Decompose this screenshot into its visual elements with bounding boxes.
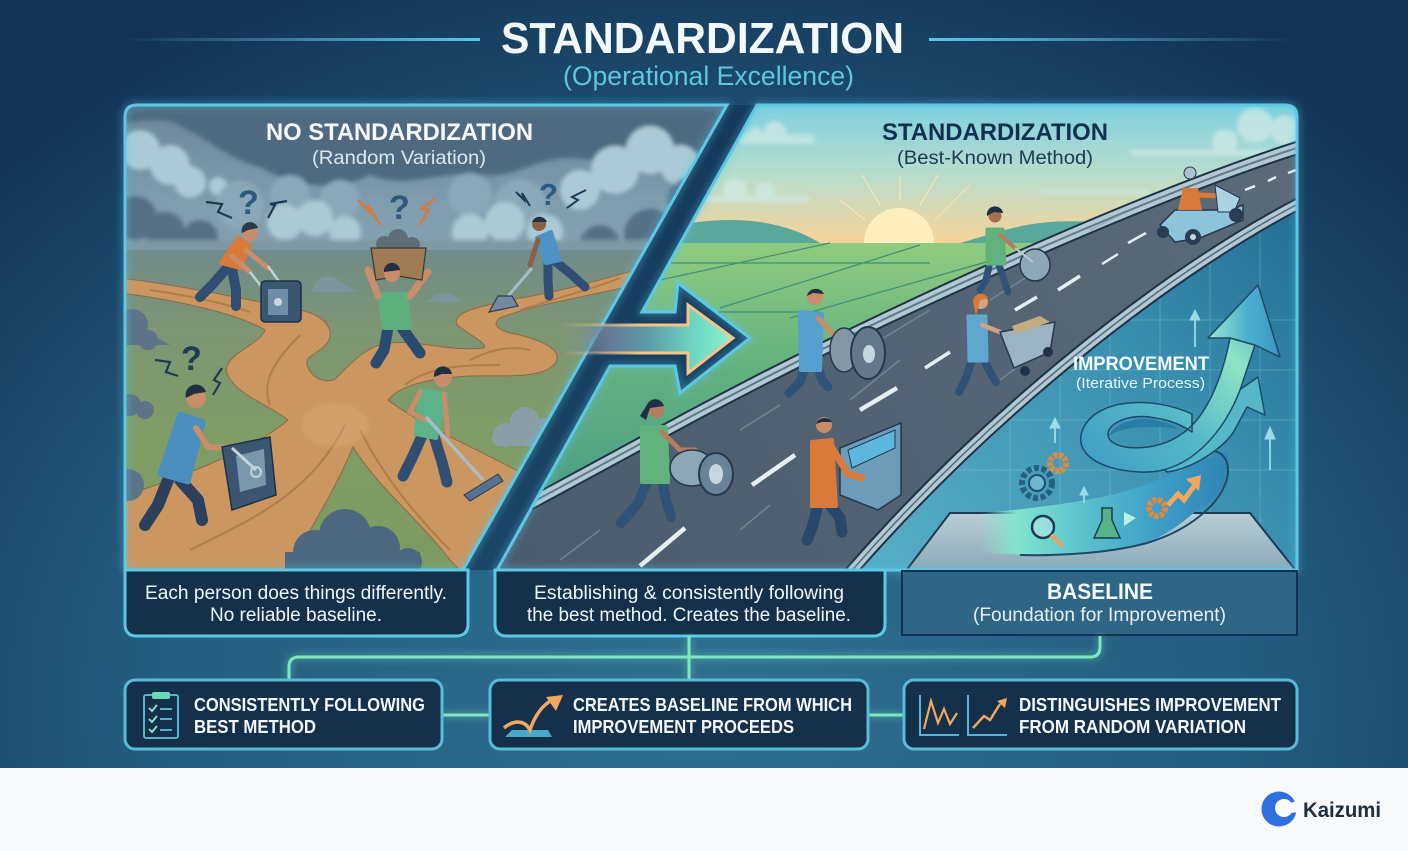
heading: no standardization bbox=[268, 123, 532, 168]
box: consistently following best method: CONSISTENTLY FOLLOWING bbox=[194, 694, 425, 715]
person: blue shirt with shovel bbox=[489, 217, 585, 312]
connector lines bbox=[289, 636, 1100, 715]
confusion marks: ? bbox=[389, 189, 410, 227]
person: woman pushing cart bbox=[959, 294, 1055, 392]
title bbox=[120, 14, 1297, 91]
caption: baseline bbox=[902, 571, 1297, 635]
lower ribbon bbox=[980, 450, 1229, 555]
person: orange shirt with block bbox=[200, 222, 301, 322]
confusion marks: ? bbox=[181, 340, 202, 378]
person: blue man with wheels bbox=[789, 289, 885, 393]
label: improvement bbox=[1074, 356, 1209, 391]
road motion streaks bbox=[560, 215, 1120, 560]
caption: standardization: the best method. Creates the baseline. bbox=[527, 605, 851, 626]
label: improvement: (Iterative Process) bbox=[1076, 376, 1205, 392]
white footer band bbox=[0, 768, 1408, 851]
icon: random vs rising charts bbox=[920, 695, 1007, 735]
heading: no standardization: (Random Variation) bbox=[312, 148, 486, 169]
logo: Kaizumi: Kaizumi bbox=[1303, 799, 1381, 822]
caption: standardization: Establishing & consistently following bbox=[534, 583, 844, 604]
lighter patch at crossing bbox=[304, 406, 366, 448]
ground bbox=[126, 250, 643, 568]
clouds: stormy sky bbox=[126, 106, 724, 250]
icon: magnifier and flask bbox=[1032, 508, 1136, 546]
caption: no standardization bbox=[125, 570, 468, 636]
vehicle: driver in cart bbox=[1157, 167, 1243, 245]
arrow between panels bbox=[562, 305, 733, 373]
person: blue shirt pushing block bbox=[145, 385, 276, 525]
green hills bbox=[682, 220, 1084, 243]
box: distinguishes improvement bbox=[904, 680, 1297, 749]
box: creates baseline: CREATES BASELINE FROM WHICH bbox=[573, 694, 852, 715]
loop back wall bbox=[1108, 419, 1180, 437]
guardrails bbox=[470, 147, 1300, 575]
box: distinguishes improvement: DISTINGUISHES IMPROVEMENT bbox=[1019, 694, 1282, 715]
panel: no standardization bbox=[112, 100, 740, 580]
caption: no standardization: Each person does things differently. bbox=[145, 583, 447, 604]
dirt paths bbox=[126, 271, 631, 568]
caption: no standardization: No reliable baseline. bbox=[210, 605, 382, 626]
path ruts bbox=[150, 278, 620, 550]
person: green woman with roller bbox=[621, 399, 733, 523]
loop and main arrow shaft bbox=[1081, 338, 1255, 472]
grass and background clouds bbox=[112, 276, 557, 576]
title: STANDARDIZATION bbox=[501, 14, 904, 63]
clouds and sun bbox=[704, 106, 1296, 243]
confusion marks: ? bbox=[539, 177, 558, 212]
baseline platform bbox=[905, 513, 1297, 572]
person: green shirt with broom bbox=[403, 366, 503, 501]
confusion marks bbox=[155, 177, 586, 395]
caption: baseline: BASELINE bbox=[1047, 579, 1153, 604]
small up arrows bbox=[1050, 310, 1275, 503]
label: improvement: IMPROVEMENT bbox=[1073, 353, 1209, 375]
box: creates baseline: IMPROVEMENT PROCEEDS bbox=[573, 716, 794, 737]
title: (Operational Excellence) bbox=[563, 61, 854, 91]
person: orange man at control console bbox=[807, 417, 901, 540]
dark diagonal band between panels bbox=[463, 105, 757, 570]
heading: standardization bbox=[882, 123, 1106, 168]
icon: baseline with rising arrow bbox=[504, 695, 563, 737]
heading: standardization: (Best-Known Method) bbox=[897, 148, 1093, 169]
fields bbox=[544, 243, 1034, 488]
caption: standardization bbox=[495, 570, 885, 636]
heading: standardization: STANDARDIZATION bbox=[882, 119, 1108, 146]
caption: baseline: (Foundation for Improvement) bbox=[973, 605, 1226, 626]
icon: improvement spiral arrow bbox=[980, 285, 1280, 555]
confusion marks: ? bbox=[238, 184, 259, 222]
logo: Kaizumi bbox=[1262, 792, 1381, 826]
panel: standardization bbox=[470, 100, 1310, 575]
box: consistently following best method: BEST METHOD bbox=[194, 716, 316, 737]
box: consistently following best method bbox=[125, 680, 442, 749]
person: green shirt carrying box bbox=[368, 229, 428, 363]
icon: checklist clipboard bbox=[144, 692, 178, 738]
heading: no standardization: NO STANDARDIZATION bbox=[266, 119, 533, 146]
road dashes bbox=[640, 170, 1296, 566]
box: distinguishes improvement: FROM RANDOM VARIATION bbox=[1019, 716, 1246, 737]
road bbox=[470, 147, 1300, 575]
second arrow bbox=[1150, 377, 1265, 472]
person: green woman with small roller bbox=[980, 206, 1050, 292]
box: creates baseline bbox=[490, 680, 868, 749]
icon: gears bbox=[1022, 455, 1201, 516]
lower right improvement backdrop bbox=[848, 203, 1300, 575]
